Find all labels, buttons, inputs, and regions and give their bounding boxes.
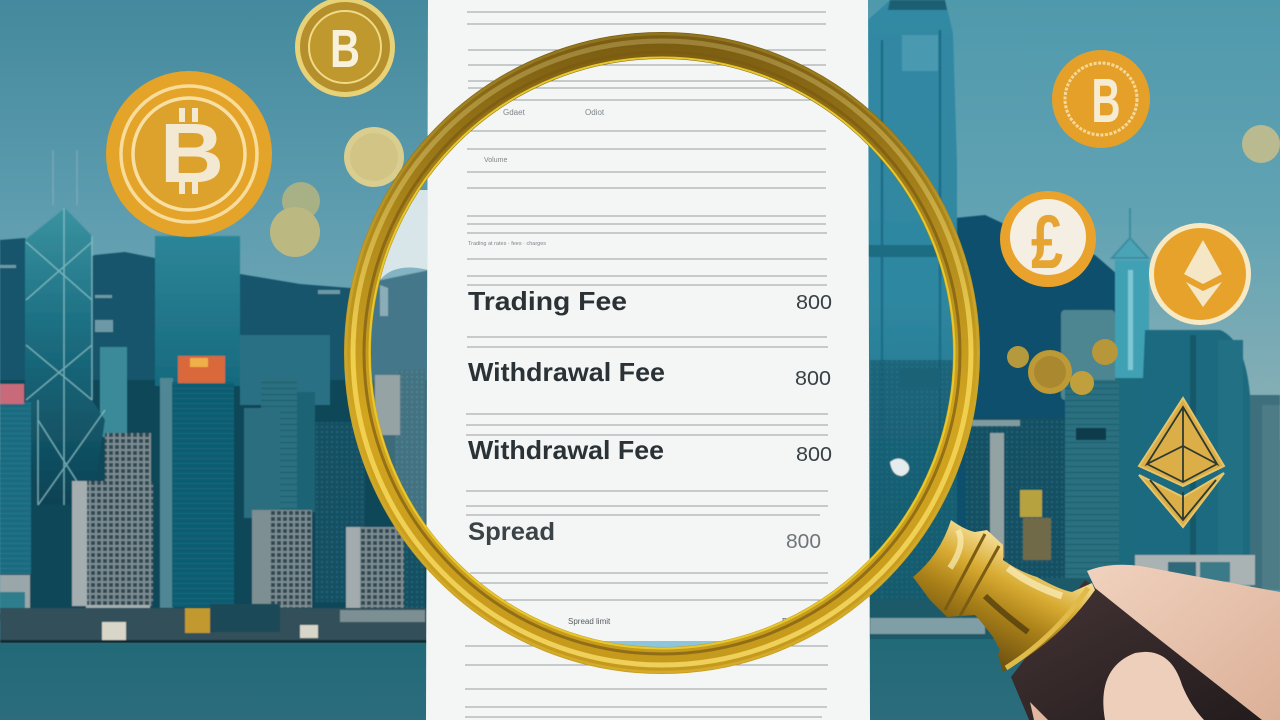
small grid tower <box>105 433 151 483</box>
faint coins left <box>270 127 404 257</box>
right large dark building <box>1135 330 1250 570</box>
coin: large bitcoin <box>106 71 272 237</box>
lens haze over city <box>360 190 770 649</box>
coin: bitcoin right <box>1052 50 1150 148</box>
small header labels: Gdaet <box>503 108 526 117</box>
fee row: trading fee <box>468 286 832 316</box>
waterfront left <box>0 604 430 643</box>
grey teal block <box>1061 310 1115 400</box>
fee row: withdrawal fee repeat: 800 <box>796 444 832 466</box>
fee sheet <box>426 0 870 720</box>
small header labels: Volume <box>484 157 507 164</box>
sky background <box>0 0 1280 460</box>
faint coin far right <box>1242 125 1280 163</box>
spire tower <box>1112 208 1149 578</box>
left skyline <box>0 150 430 620</box>
fee row: withdrawal fee: 800 <box>795 368 831 390</box>
coin: ethereum round <box>1149 223 1251 325</box>
fee row: withdrawal fee: Withdrawal Fee <box>468 357 665 387</box>
coin: gold top <box>295 0 395 97</box>
grey tower one <box>72 481 153 619</box>
hand: fingers <box>1087 565 1280 720</box>
striped block <box>1065 380 1119 580</box>
dark teal central tower <box>160 356 234 608</box>
coin: white centre pound <box>1000 191 1096 287</box>
fee row: spread: 800 <box>786 531 821 553</box>
fee row: withdrawal fee repeat <box>468 435 832 466</box>
hand: lower skin <box>1030 702 1048 720</box>
mountain highlights <box>0 265 388 332</box>
dark mass behind lower towers <box>0 380 430 610</box>
grey tower three <box>346 527 404 612</box>
fee row: spread <box>468 518 821 553</box>
left edge tower <box>0 384 31 613</box>
right mountain <box>955 215 1118 600</box>
harbour water <box>0 640 1280 720</box>
podium <box>1135 555 1255 585</box>
magnifier handle grip <box>1011 580 1280 720</box>
right skyline <box>868 0 1280 640</box>
teal midrise tower <box>155 236 240 386</box>
fee row: trading fee: 800 <box>796 292 832 314</box>
ruled lines <box>465 12 828 717</box>
fee row: trading fee: Trading Fee <box>468 286 627 316</box>
small header labels: Odiot <box>585 108 605 117</box>
coin: white centre pound: £ <box>1031 200 1063 285</box>
mid block with pale windows <box>965 418 1065 583</box>
fee row: withdrawal fee repeat: Withdrawal Fee <box>468 435 664 465</box>
magnifier ring <box>346 34 978 672</box>
small header labels: Trading at rates · fees · charges <box>468 241 546 247</box>
midrise band behind <box>100 335 330 437</box>
right far buildings <box>1250 395 1280 590</box>
IFC tower <box>868 0 957 600</box>
hand: thumb <box>1103 652 1204 720</box>
magnifier brass collar <box>913 520 1095 672</box>
grey tower two <box>252 510 312 608</box>
fee row: spread: Spread <box>468 518 555 546</box>
fee row: withdrawal fee <box>468 357 831 390</box>
bank of china tower <box>25 150 105 505</box>
small header labels <box>468 108 792 626</box>
small header labels: Ba <box>782 617 792 626</box>
coin: bitcoin right: B <box>1092 67 1120 136</box>
coin: gold top: B <box>330 19 360 79</box>
coin: large bitcoin: B <box>160 106 224 200</box>
striped towers <box>244 370 425 610</box>
waterfront strip <box>868 578 1108 640</box>
ethereum diamond <box>1139 398 1224 527</box>
left mountain ridge <box>0 238 430 620</box>
small gold coins <box>1007 339 1118 395</box>
small header labels: Spread limit <box>568 617 611 626</box>
